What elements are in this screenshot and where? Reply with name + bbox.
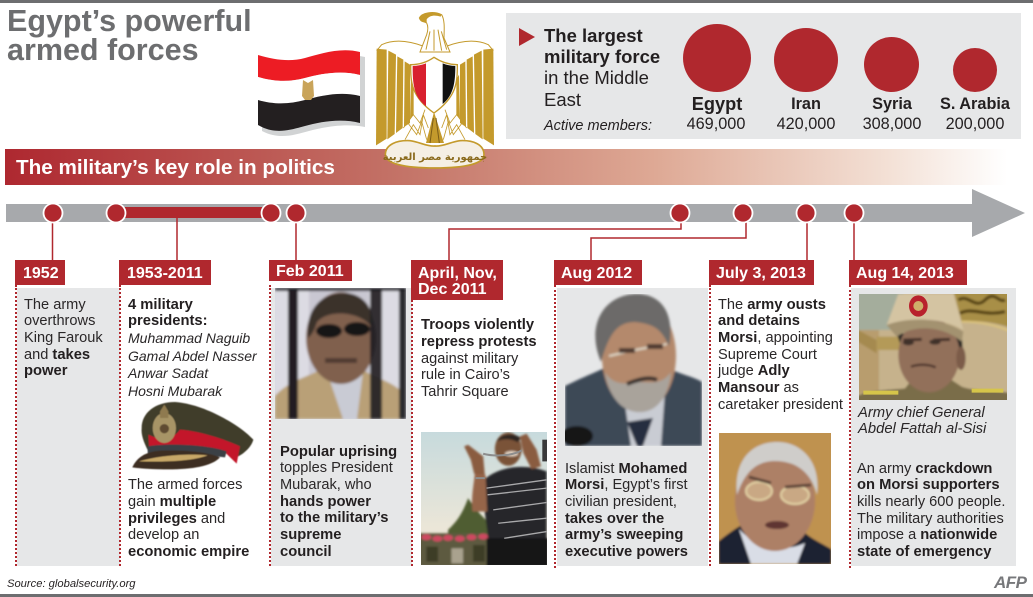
panel heading text [544,25,660,110]
text: army crackdown on Morsi supporters: An army crackdown [857,461,992,477]
circle: Iran [774,28,838,92]
date label: July 3, 2013 [709,260,814,285]
text: army ousts Morsi: and detains [718,313,800,329]
text: troops repress protests: Tahrir Square [421,384,509,400]
text: popular uprising: Popular uprising [280,444,397,460]
panel: Feb 2011 [269,260,412,566]
text: army crackdown on Morsi supporters [857,461,1005,560]
text: troops repress protests: against military [421,351,518,367]
text: armed forces privileges [128,477,249,560]
label: Iran: Iran [791,95,821,113]
text: army ousts Morsi: judge Adly [718,363,790,379]
text: army crackdown on Morsi supporters: on Morsi supporters [857,477,1000,493]
text: popular uprising: hands power [280,494,371,510]
text: army ousts Morsi: Morsi, appointing [718,330,833,346]
text: army crackdown on Morsi supporters: impose a nationwide [857,527,997,543]
text: troops repress protests: rule in Cairo’s [421,367,510,383]
text: army crackdown on Morsi supporters: The military authorities [857,511,1004,527]
text: popular uprising: supreme [280,527,342,543]
date label: April, Nov, Dec 2011: Dec 2011 [418,280,487,298]
text: troops repress protests: Troops violently [421,317,534,333]
panel: 1953-2011 [119,260,258,566]
text: popular uprising: to the military’s [280,510,388,526]
panel: Aug 14, 2013 [849,260,1016,568]
timeline arrow with date markers [6,189,1025,260]
text: armed forces privileges: economic empire [128,544,249,560]
date label: 1953-2011 [119,260,211,285]
date label: April, Nov, Dec 2011: April, Nov, [418,264,497,282]
text: popular uprising: topples President [280,460,393,476]
date label: Aug 2012: Aug 2012 [561,264,632,282]
title: Egypt’s powerful [7,4,252,38]
text: army ousts Morsi: Mansour as [718,380,799,396]
text: 1952: The army [24,297,86,313]
AFP logo: AFP [994,573,1026,592]
title [7,4,252,67]
date label: Feb 2011: Feb 2011 [276,262,344,280]
date label: Aug 14, 2013 [849,260,967,285]
text: army ousts Morsi: The army ousts [718,297,826,313]
caption: Army chief General Abdel Fattah al-Sisi [857,405,987,437]
caption: Army chief General Abdel Fattah al-Sisi: Abdel Fattah al-Sisi [858,421,986,437]
value: Iran: 420,000 [777,115,835,133]
text: four military presidents: Hosni Mubarak [128,383,222,399]
label: Syria: Syria [872,95,912,113]
text: Islamist Mohamed Morsi [565,461,688,560]
date label: 1952 [15,260,65,285]
text: popular uprising [280,444,397,560]
text: 1952: and takes [24,347,90,363]
circle: Syria [864,37,919,92]
panel: July 3, 2013 [709,260,843,566]
active members label: Active members: [544,118,652,134]
text: army crackdown on Morsi supporters: kills nearly 600 people. [857,494,1005,510]
photo: chained protester in Tahrir Square [421,432,547,565]
label: S. Arabia: S. Arabia [940,95,1010,113]
banner: the military's key role in politics: The military’s key role in politics [16,156,335,179]
circle: Egypt [683,24,751,92]
icon: eagle of Saladin emblem: جمهورية مصر العربية [383,152,487,163]
caption: Army chief General Abdel Fattah al-Sisi: Army chief General [858,405,985,421]
value: Egypt: 469,000 [687,115,745,133]
text: army ousts Morsi: Supreme Court [718,347,817,363]
banner: the military's key role in politics [5,149,1007,185]
text: armed forces privileges: The armed forces [128,477,242,493]
photo: Abdel Fattah al-Sisi [859,294,1007,400]
text: armed forces privileges: privileges and [128,511,225,527]
date label: Aug 2012 [554,260,642,285]
date label: July 3, 2013: July 3, 2013 [716,264,806,282]
icon: Egyptian flag [258,50,365,136]
text: four military presidents: 4 military [128,297,193,313]
text: Islamist Mohamed Morsi: Morsi, Egypt’s first [565,477,688,493]
text: army crackdown on Morsi supporters: state of emergency [857,544,991,560]
text: 1952 [24,297,103,379]
date label: 1952: 1952 [23,264,59,282]
panel heading text: military force [544,46,660,67]
panel heading text: in the Middle [544,67,649,88]
date label: April, Nov, Dec 2011 [411,260,503,300]
text: four military presidents: presidents: [128,313,208,329]
text: popular uprising: council [280,544,332,560]
text: Islamist Mohamed Morsi: army’s sweeping [565,527,683,543]
text: troops repress protests: repress protests [421,334,537,350]
text: 1952: King Farouk [24,330,103,346]
value: Syria: 308,000 [863,115,921,133]
date label: Aug 14, 2013: Aug 14, 2013 [856,264,954,282]
icon: military officer cap [132,401,254,470]
text: Islamist Mohamed Morsi: executive powers [565,544,688,560]
text: four military presidents [127,297,258,399]
text: armed forces privileges: gain multiple [128,494,216,510]
panel: 1952 [15,260,120,566]
text: four military presidents: Anwar Sadat [128,365,208,381]
title: armed forces [7,33,199,67]
text: army ousts Morsi: caretaker president [718,397,843,413]
text: Islamist Mohamed Morsi: takes over the [565,511,664,527]
date label: Feb 2011 [269,260,352,281]
photo: Mohamed Morsi [565,294,702,446]
icon: eagle of Saladin emblem [376,12,494,169]
label: Egypt: Egypt [692,94,742,114]
source note: Source: globalsecurity.org [7,578,136,590]
panel: largest military force in the Middle East [506,13,1021,139]
text: 1952: overthrows [24,313,95,329]
value: Saudi Arabia: 200,000 [946,115,1004,133]
photo: Mubarak behind bars [275,288,406,419]
text: troops repress protests [421,317,537,400]
text: Islamist Mohamed Morsi: civilian president, [565,494,677,510]
text: armed forces privileges: develop an [128,527,199,543]
text: popular uprising: Mubarak, who [280,477,372,493]
text: four military presidents: Gamal Abdel Nasser [128,348,257,364]
text: Islamist Mohamed Morsi: Islamist Mohamed [565,461,687,477]
circle: Saudi Arabia [953,48,997,92]
date label: 1953-2011: 1953-2011 [127,264,203,282]
panel: Aug 2012 [554,260,708,568]
text: 1952: power [24,363,67,379]
text: four military presidents: Muhammad Naguib [128,330,250,346]
text: army ousts Morsi [718,297,843,413]
panel heading text: East [544,89,581,110]
panel heading text: The largest [544,25,643,46]
icon: red triangle marker [519,28,535,46]
panel: April, Nov, Dec 2011 [411,260,547,566]
photo: Adly Mansour [719,433,831,564]
